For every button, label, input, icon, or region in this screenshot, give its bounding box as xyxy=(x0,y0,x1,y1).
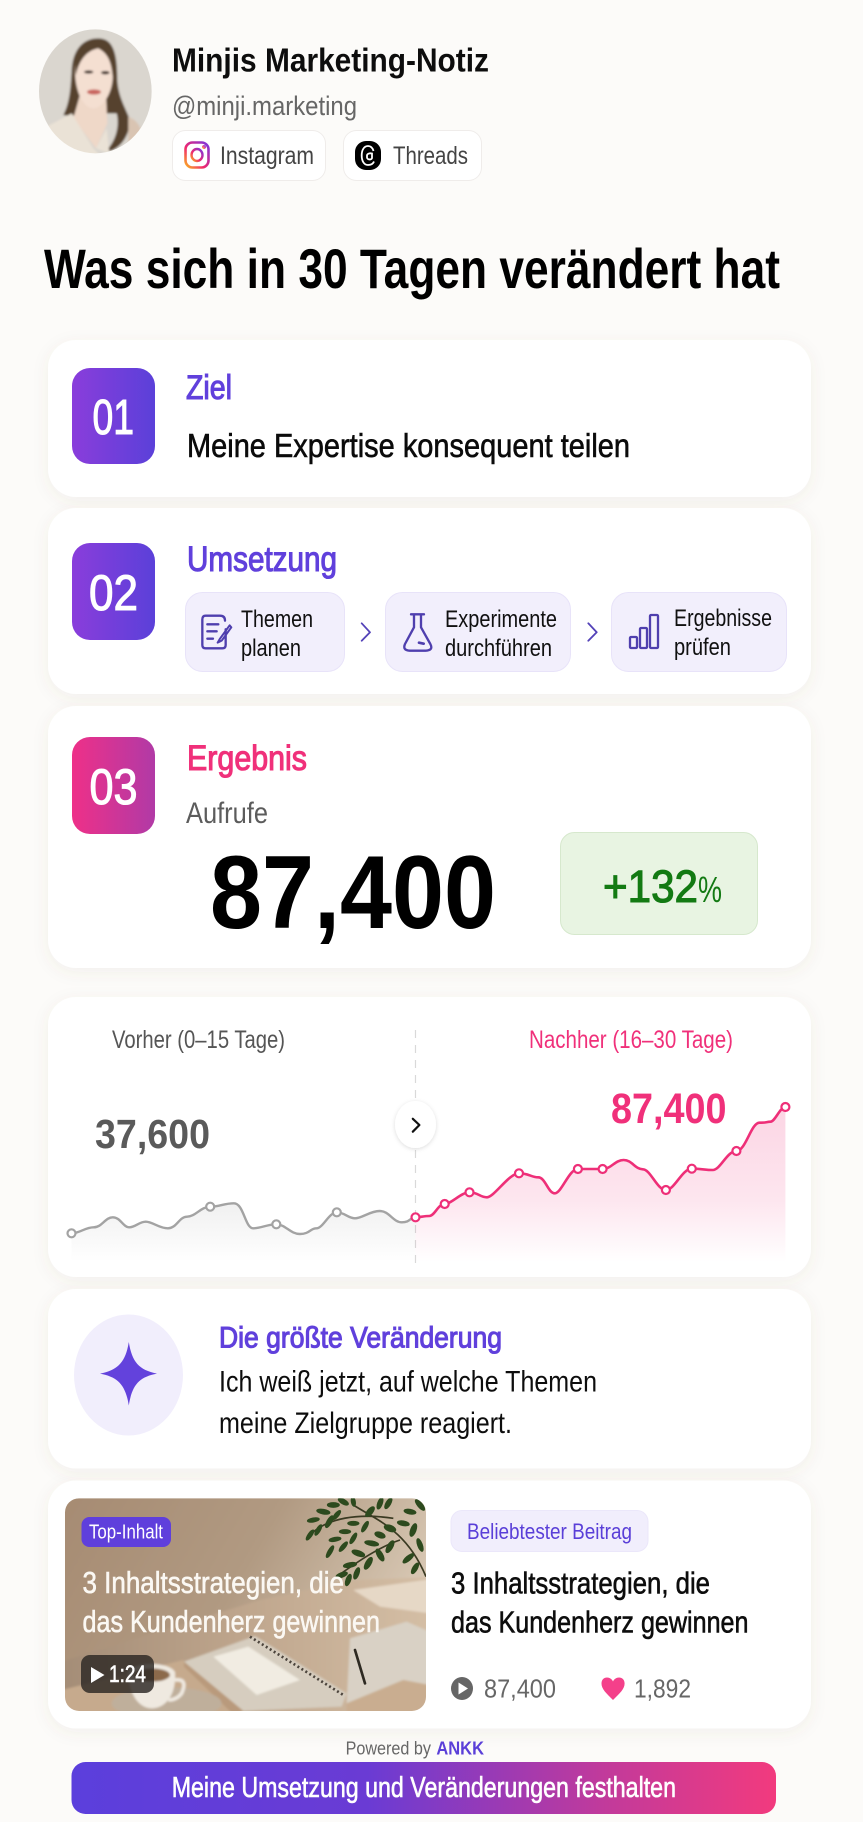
line chart: before xyxy=(68,1203,416,1262)
icon: bar chart xyxy=(630,615,658,648)
instagram pill: Instagram xyxy=(220,142,314,170)
tag: beliebtester beitrag xyxy=(451,1510,648,1552)
powered by credit: Powered by xyxy=(346,1738,432,1759)
value: after: 87,400 xyxy=(611,1085,726,1133)
label: nachher: Nachher (16–30 Tage) xyxy=(529,1026,733,1054)
badge 02 xyxy=(72,543,155,640)
arrow: before to after xyxy=(395,1101,436,1148)
badge 03: 03 xyxy=(90,759,138,815)
tag: top-inhalt: Top-Inhalt xyxy=(89,1522,163,1544)
arrow 2 xyxy=(588,623,597,641)
call to action button xyxy=(72,1762,776,1814)
panel: ziel xyxy=(48,340,811,497)
growth callout xyxy=(560,832,758,934)
arrow 1 xyxy=(362,623,370,641)
account handle: @minji.marketing xyxy=(172,91,357,121)
post title: das Kundenherz gewinnen xyxy=(451,1605,748,1640)
icon: threads xyxy=(355,141,381,170)
panel: umsetzung xyxy=(48,508,811,694)
stat: likes xyxy=(602,1674,691,1704)
step: themen planen xyxy=(186,592,344,672)
views label: Aufrufe xyxy=(186,797,268,830)
goal statement: Meine Expertise konsequent teilen xyxy=(187,427,630,464)
growth callout: % xyxy=(698,869,722,910)
instagram pill xyxy=(172,130,326,180)
body line 2: meine Zielgruppe reagiert. xyxy=(219,1407,512,1440)
icon: sparkle xyxy=(74,1314,183,1436)
heading: biggest change: Die größte Veränderung xyxy=(219,1321,502,1354)
thumbnail headline: das Kundenherz gewinnen xyxy=(82,1604,380,1639)
step: ergebnisse pruefen: Ergebnisse xyxy=(674,605,772,632)
tag: beliebtester beitrag: Beliebtester Beitrag xyxy=(467,1519,632,1544)
stat: views xyxy=(451,1674,556,1704)
account name: Minjis Marketing-Notiz xyxy=(172,42,489,78)
heading: ziel: Ziel xyxy=(186,369,232,407)
step: ergebnisse pruefen xyxy=(612,592,786,672)
panel: biggest change xyxy=(48,1289,811,1468)
stat: views: 87,400 xyxy=(484,1674,556,1704)
views number: 87,400 xyxy=(210,835,496,951)
thumbnail headline xyxy=(82,1565,380,1639)
value: before: 37,600 xyxy=(95,1111,210,1157)
badge 02: 02 xyxy=(89,565,138,621)
photo thumbnail xyxy=(62,1495,429,1719)
badge 03 xyxy=(72,737,155,834)
line chart: after xyxy=(412,1103,789,1262)
badge 01: 01 xyxy=(92,391,134,445)
step: themen planen: planen xyxy=(241,635,301,662)
badge 01 xyxy=(72,368,155,464)
heading: umsetzung: Umsetzung xyxy=(187,540,337,579)
post title: 3 Inhaltsstrategien, die xyxy=(451,1566,710,1600)
duration badge: 1:24 xyxy=(109,1661,146,1688)
step: themen planen: Themen xyxy=(241,606,313,633)
call to action button: Meine Umsetzung und Veränderungen festhalten xyxy=(172,1772,676,1804)
step: experimente durchfuehren xyxy=(386,592,570,672)
step: ergebnisse pruefen: prüfen xyxy=(674,634,731,661)
powered by credit: ANKK xyxy=(436,1738,485,1759)
threads pill: Threads xyxy=(393,142,468,170)
stat: likes: 1,892 xyxy=(634,1674,691,1704)
growth callout: +132 xyxy=(603,861,698,912)
step: experimente durchfuehren: durchführen xyxy=(445,635,552,662)
body line 1: Ich weiß jetzt, auf welche Themen xyxy=(219,1365,597,1398)
tag: top-inhalt xyxy=(82,1517,171,1547)
threads pill xyxy=(344,130,482,180)
icon: flask xyxy=(404,614,431,651)
step: experimente durchfuehren: Experimente xyxy=(445,606,557,633)
panel: top content xyxy=(48,1480,811,1728)
label: vorher: Vorher (0–15 Tage) xyxy=(112,1026,285,1054)
icon: instagram xyxy=(186,142,208,168)
profile header xyxy=(37,27,489,181)
panel: ergebnis xyxy=(48,706,811,968)
thumbnail headline: 3 Inhaltsstrategien, die xyxy=(82,1565,344,1600)
icon: document and pencil xyxy=(202,616,231,648)
avatar portrait xyxy=(37,27,153,158)
heading: ergebnis: Ergebnis xyxy=(187,739,307,778)
post title xyxy=(451,1566,748,1640)
duration badge xyxy=(81,1655,154,1693)
panel: comparison chart xyxy=(48,997,811,1277)
